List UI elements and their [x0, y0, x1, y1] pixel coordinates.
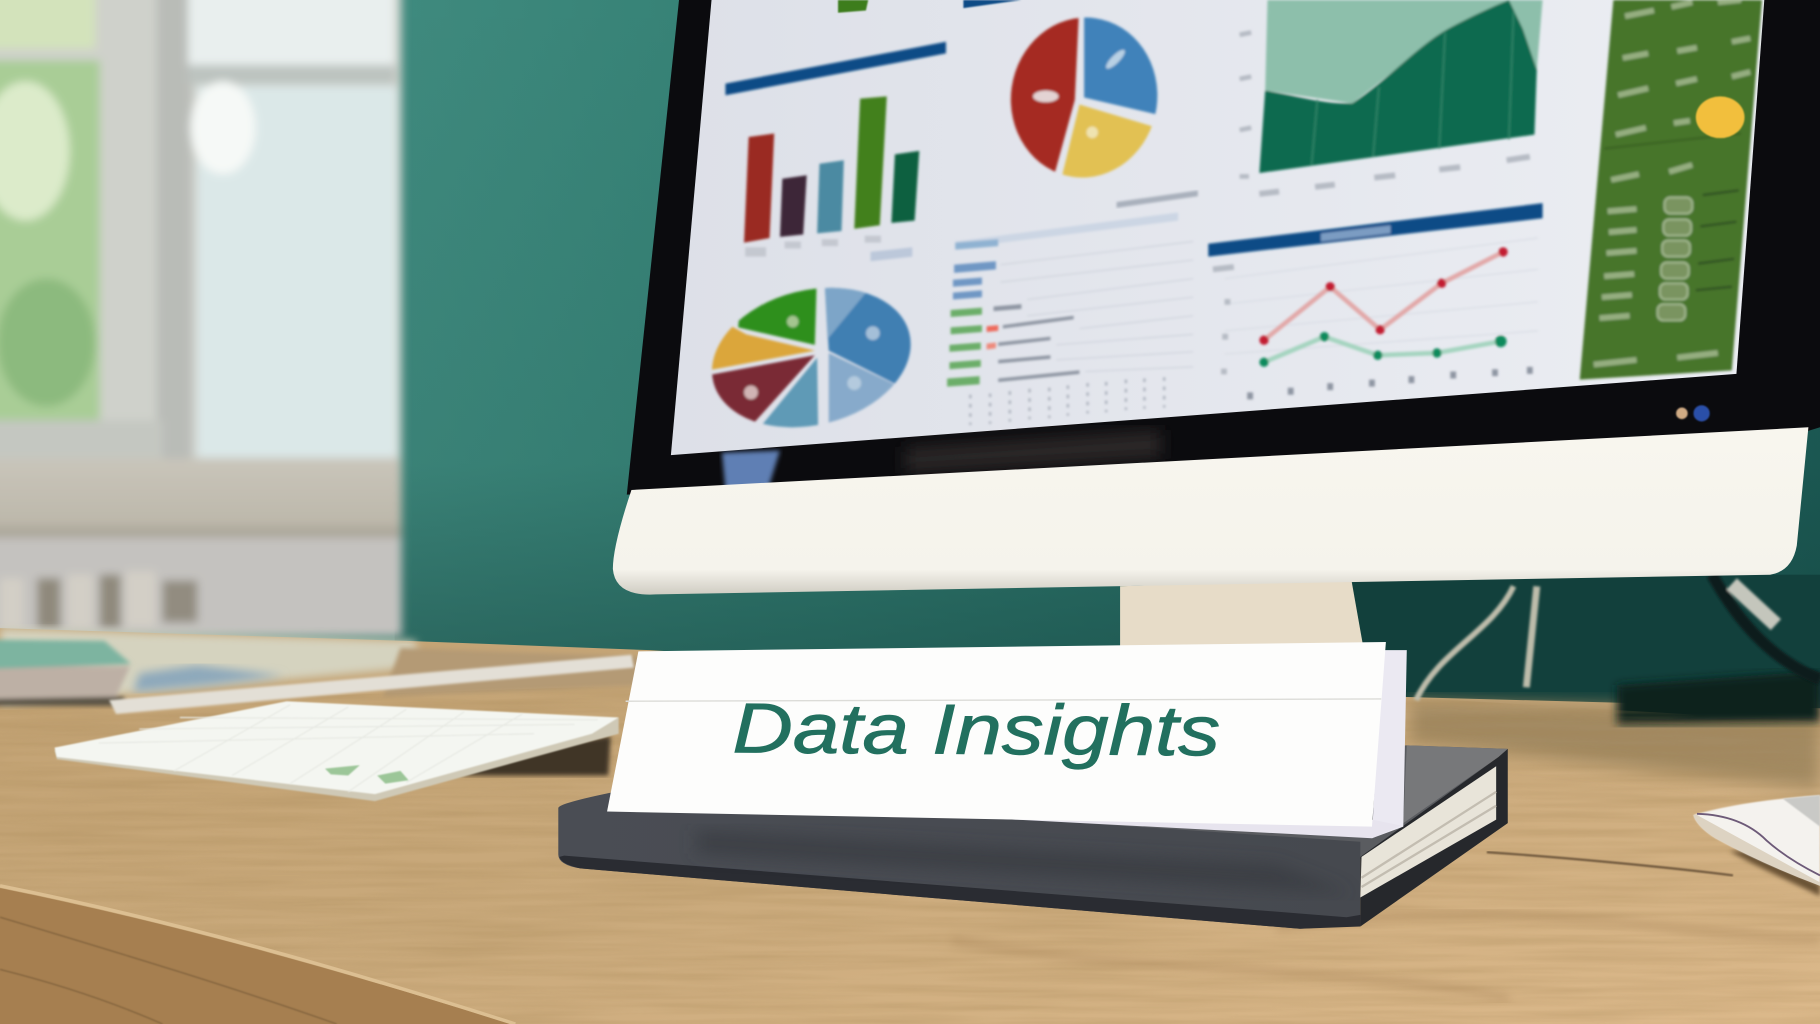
bar chart: [725, 42, 946, 261]
monitor chin: [613, 427, 1808, 595]
keyboard: [55, 701, 619, 801]
teal wall: [395, 0, 1820, 743]
pie caption: [1117, 190, 1198, 208]
area chart: [1240, 0, 1543, 194]
line chart: [1208, 203, 1543, 399]
monitor status lights: [1676, 405, 1710, 421]
monitor bezel: [627, 0, 1820, 495]
table value grid: [970, 377, 1164, 425]
yellow highlight badge: [1696, 96, 1745, 138]
pen on desk: [109, 655, 634, 714]
green sidebar panel: [1580, 0, 1762, 380]
exploded pie chart: [710, 286, 912, 429]
sidebar text rows: [1594, 0, 1750, 365]
cables: [1416, 575, 1820, 700]
top green bar fragment: [838, 0, 1021, 13]
mouse: [1693, 795, 1820, 896]
desk: [0, 628, 1820, 1024]
sidebar value chips: [1658, 197, 1692, 320]
monitor stand: [1120, 578, 1364, 650]
name card: [607, 642, 1407, 838]
blurred object behind keyboard: [133, 665, 284, 692]
dashboard screen: [671, 0, 1764, 455]
pie chart: red blue yellow: [1008, 16, 1160, 180]
notebook on desk: [0, 640, 131, 706]
book: [558, 745, 1508, 929]
window: [0, 0, 402, 636]
card title: Data Insights: [732, 689, 1220, 771]
data table: [947, 212, 1193, 425]
